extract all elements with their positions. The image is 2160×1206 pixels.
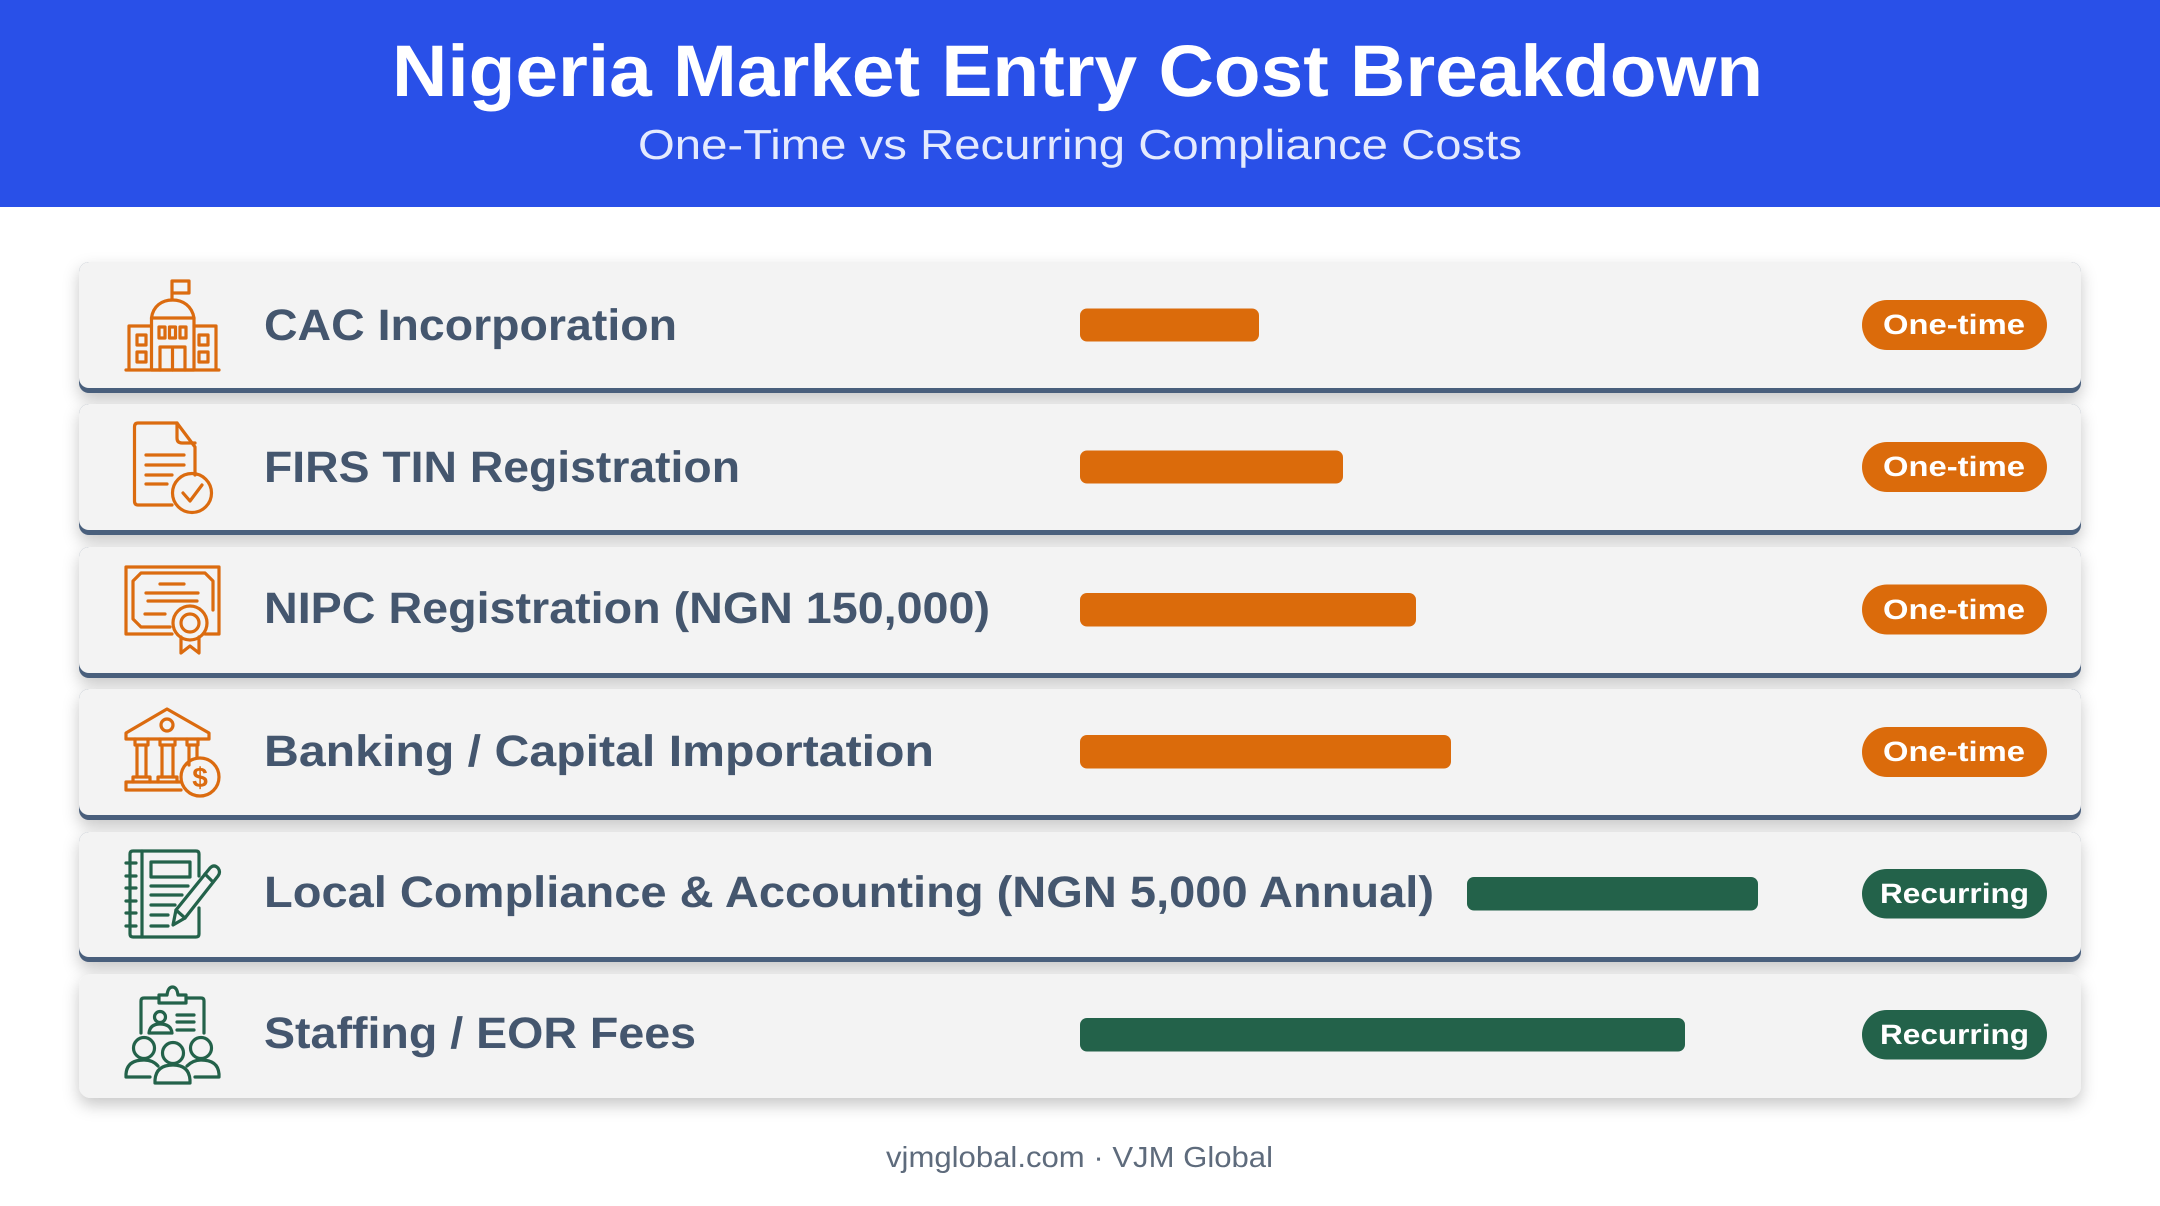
label: Banking / Capital Importation xyxy=(264,727,934,776)
badge: one-time: One-time xyxy=(1883,451,2025,482)
panel: Local Compliance and Accounting row xyxy=(79,832,2081,962)
icon: bank with dollar coin: $ xyxy=(192,762,208,793)
label: CAC Incorporation xyxy=(264,301,677,350)
icon: notebook and pencil xyxy=(126,851,220,937)
badge: recurring: Recurring xyxy=(1880,878,2029,909)
panel: Staffing / EOR Fees row xyxy=(79,974,2081,1098)
badge: recurring xyxy=(1862,1010,2047,1060)
header banner xyxy=(0,0,2160,207)
footer source: vjmglobal.com · VJM Global xyxy=(886,1142,1273,1174)
label: NIPC Registration (NGN 150,000) xyxy=(264,584,990,633)
label: Local Compliance & Accounting (NGN 5,000 Annual) xyxy=(264,868,1434,917)
badge: one-time: One-time xyxy=(1883,736,2025,767)
subtitle: One-Time vs Recurring Compliance Costs xyxy=(638,121,1522,168)
panel: FIRS TIN Registration row xyxy=(79,404,2081,535)
panel: NIPC Registration row xyxy=(79,547,2081,678)
bar: recurring cost xyxy=(1467,877,1758,910)
bar: one-time cost xyxy=(1080,308,1259,342)
icon: document with check xyxy=(134,423,212,512)
bar: one-time cost xyxy=(1080,735,1451,768)
badge: one-time xyxy=(1862,300,2047,350)
label: Staffing / EOR Fees xyxy=(264,1009,696,1058)
title: Nigeria Market Entry Cost Breakdown xyxy=(392,31,1763,112)
badge: one-time xyxy=(1862,442,2047,492)
badge: one-time xyxy=(1862,584,2047,634)
panel: Banking / Capital Importation row xyxy=(79,689,2081,820)
label: FIRS TIN Registration xyxy=(264,443,740,492)
icon: certificate with seal xyxy=(126,567,219,653)
icon: clipboard and team xyxy=(126,987,219,1083)
badge: recurring: Recurring xyxy=(1880,1019,2029,1050)
icon: bank with dollar coin xyxy=(126,709,219,796)
bar: one-time cost xyxy=(1080,450,1343,484)
badge: one-time: One-time xyxy=(1883,309,2025,340)
panel: CAC Incorporation row xyxy=(79,262,2081,393)
badge: one-time: One-time xyxy=(1883,594,2025,625)
bar: recurring cost xyxy=(1080,1018,1685,1052)
icon: government building xyxy=(126,281,219,370)
badge: recurring xyxy=(1862,869,2047,918)
bar: one-time cost xyxy=(1080,593,1416,626)
badge: one-time xyxy=(1862,727,2047,777)
